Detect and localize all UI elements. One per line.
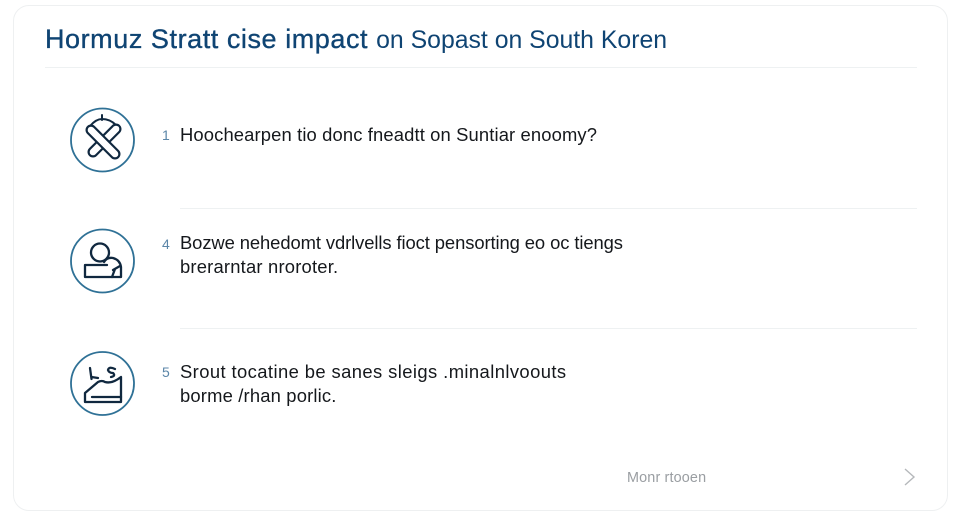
title: Hormuz Stratt cise impact on Sopast on South Koren bbox=[45, 24, 667, 54]
item 3 text: Srout tocatine be sanes sleigs .minalnlvoouts bbox=[180, 361, 566, 382]
icon: crossed tools bbox=[70, 108, 135, 172]
item 1 number: 1 bbox=[162, 127, 170, 143]
footer label: Monr rtooen bbox=[627, 470, 706, 486]
item 3 text: borme /rhan porlic. bbox=[180, 385, 337, 406]
item 2 text bbox=[180, 232, 623, 277]
icon: chevron right bbox=[904, 468, 915, 486]
item 2 text: Bozwe nehedomt vdrlvells fioct pensorting eo oc tiengs bbox=[180, 232, 623, 253]
item 3 text bbox=[180, 361, 566, 406]
item 2 number: 4 bbox=[162, 236, 170, 252]
icon: terrain chart bbox=[70, 351, 135, 416]
item 2 text: brerarntar nroroter. bbox=[180, 256, 338, 277]
item 1 text: Hoochearpen tio donc fneadtt on Suntiar enoomy? bbox=[180, 124, 597, 145]
icon: person at desk bbox=[70, 228, 135, 294]
item 3 number: 5 bbox=[162, 364, 170, 380]
